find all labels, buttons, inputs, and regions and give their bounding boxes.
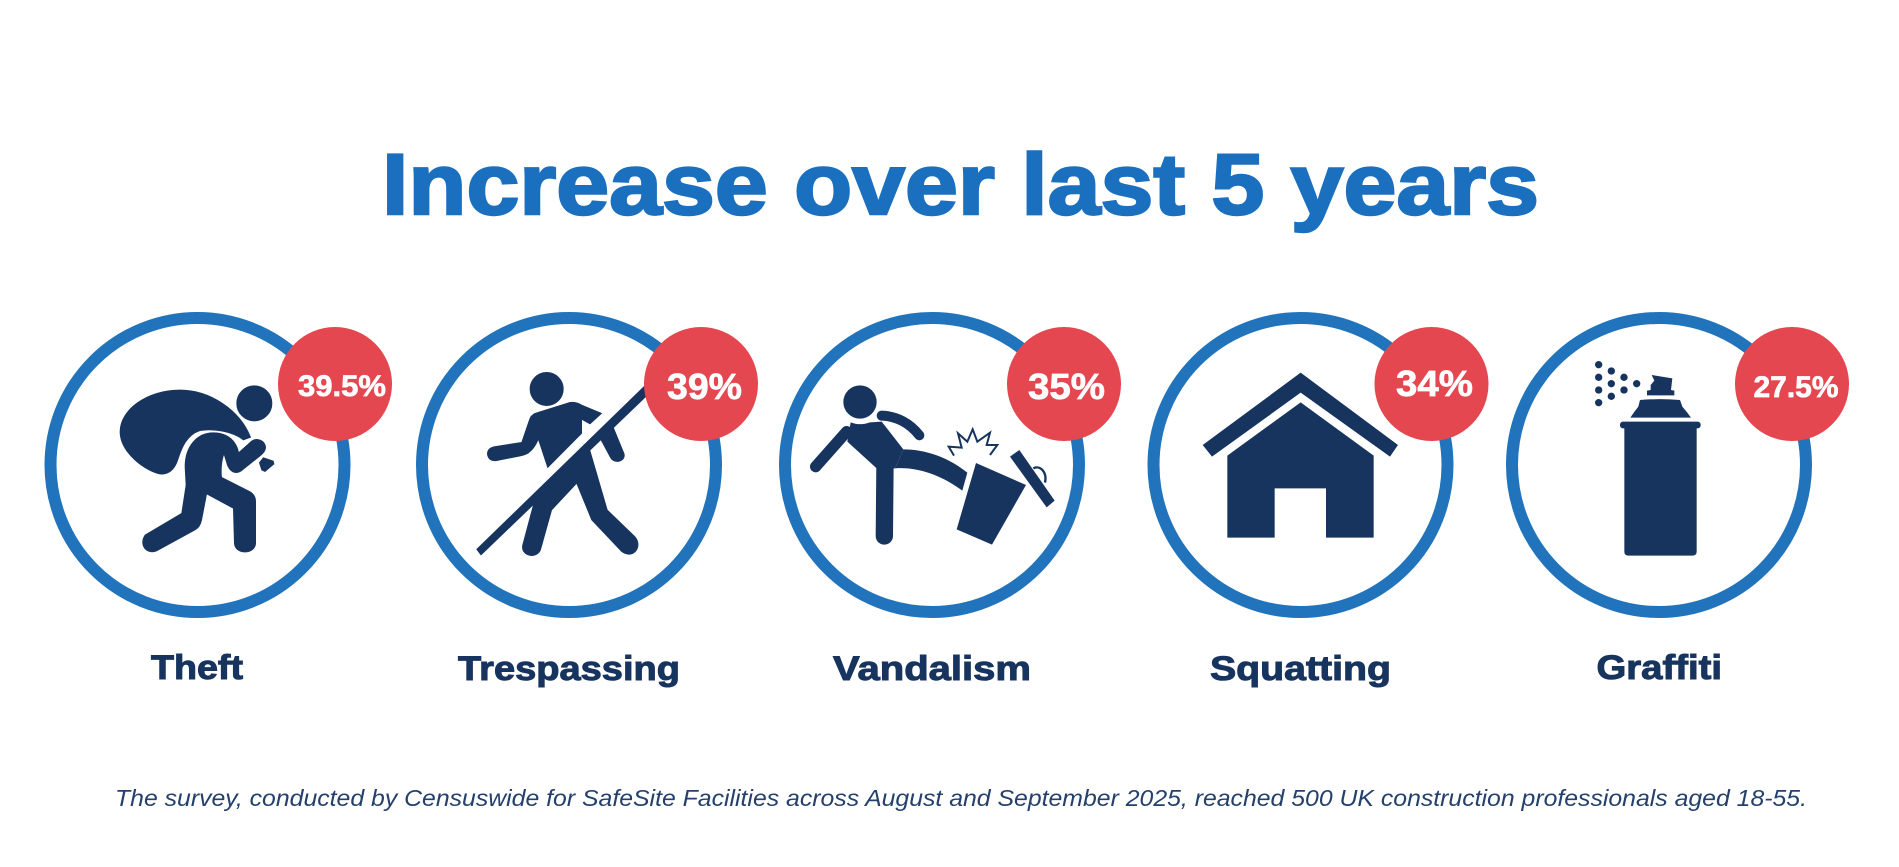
label: Graffiti: Graffiti [1596, 649, 1722, 687]
badge: 39.5% [278, 327, 392, 441]
badge: 39.5%: 39.5% [298, 370, 386, 403]
ring: squatting [1154, 318, 1448, 612]
ring: trespassing [422, 318, 716, 612]
icon: house [1203, 373, 1398, 538]
title: Increase over last 5 years [382, 137, 1539, 233]
panel: graffiti [1512, 318, 1849, 687]
badge: 34% [1374, 327, 1488, 441]
ring: graffiti [1512, 318, 1806, 612]
icon: thief carrying sack [120, 386, 274, 552]
label: Vandalism: Vandalism [833, 650, 1031, 688]
label: Squatting: Squatting [1210, 650, 1391, 688]
icon: person crossed out [477, 372, 653, 556]
badge: 34%: 34% [1396, 363, 1473, 404]
label: Theft: Theft [151, 649, 243, 687]
badge: 35%: 35% [1028, 366, 1105, 407]
badge: 39%: 39% [667, 366, 742, 407]
label: Trespassing: Trespassing [458, 650, 680, 688]
panel: theft [50, 318, 392, 687]
ring: vandalism [785, 318, 1079, 612]
badge: 27.5%: 27.5% [1754, 371, 1838, 404]
ring: theft [50, 318, 344, 612]
icon: spray can [1595, 361, 1701, 556]
badge: 35% [1007, 327, 1121, 441]
panel: trespassing [422, 318, 758, 688]
badge: 27.5% [1735, 327, 1849, 441]
panel: squatting [1154, 318, 1488, 688]
footnote: The survey, conducted by Censuswide for SafeSite Facilities across August and September 2025, reached 500 UK construction professionals aged 18-55. [115, 785, 1807, 811]
badge: 39% [644, 327, 758, 441]
panel: vandalism [785, 318, 1121, 688]
icon: person kicking bin [816, 385, 1055, 545]
